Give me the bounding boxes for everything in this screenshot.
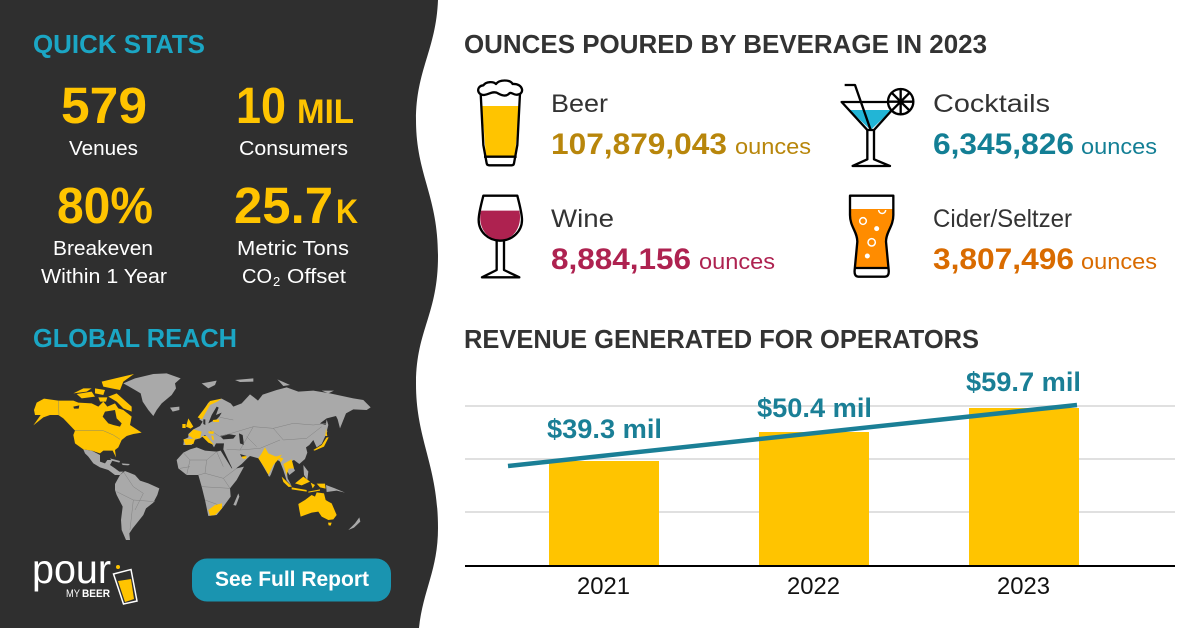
label: cider/seltzer: ounces (1081, 249, 1157, 274)
label: cider/seltzer: Cider/Seltzer (933, 205, 1072, 233)
value labels: $50.4 mil (757, 393, 872, 423)
trend line (508, 405, 1077, 466)
heading: quick stats: QUICK STATS (33, 29, 205, 59)
South Africa (208, 503, 222, 516)
icon: cider glass (850, 196, 893, 277)
label: wine: 8,884,156 (551, 243, 691, 276)
label: cocktails: Cocktails (933, 90, 1050, 118)
heading: ounces poured: OUNCES POURED BY BEVERAGE IN 2023 (464, 29, 987, 59)
stat: co2 offset: 25.7 (234, 177, 333, 234)
stat: consumers: MIL (297, 93, 354, 131)
stat: venues (61, 77, 147, 160)
islands (348, 517, 360, 530)
value labels (547, 367, 1081, 444)
Poland (213, 419, 219, 422)
world map (33, 373, 371, 540)
label: wine (551, 205, 775, 276)
bar: 2021 (549, 461, 659, 565)
Canada and USA mainland (33, 399, 142, 457)
icon: wine glass (479, 196, 522, 277)
Mexico and Central America (83, 449, 123, 475)
stat: co2 offset: K (336, 193, 358, 231)
heading: revenue: REVENUE GENERATED FOR OPERATORS (464, 324, 979, 354)
stat: breakeven (41, 177, 167, 288)
South America (115, 471, 159, 540)
year labels: 2023 (997, 573, 1050, 600)
bar: 2022 (759, 432, 869, 565)
logo: pour my beer: MY (66, 588, 81, 600)
stat: co2 offset: Metric Tons (237, 238, 349, 260)
Arctic islands (102, 374, 134, 390)
year labels: 2022 (787, 573, 840, 600)
Italy and Balkans (202, 436, 214, 445)
year labels (577, 573, 1050, 600)
stat: co2 offset: CO (242, 266, 272, 288)
Japan (313, 437, 329, 451)
India (258, 447, 282, 475)
label: beer: Beer (551, 90, 608, 118)
stat: venues: 579 (61, 77, 147, 134)
stat: consumers: 10 (236, 77, 286, 134)
label: beer (551, 90, 811, 161)
bar: 2023 (969, 408, 1079, 565)
icon: cocktail glass (842, 85, 913, 166)
stat: breakeven: 80% (57, 177, 153, 234)
label: cider/seltzer: 3,807,496 (933, 243, 1074, 276)
label: beer: 107,879,043 (551, 128, 727, 161)
label: wine: ounces (699, 249, 775, 274)
logo: pour my beer: BEER (82, 588, 110, 600)
bar chart: revenue (465, 367, 1175, 600)
stat: breakeven: Breakeven (53, 238, 153, 260)
label: cocktails: ounces (1081, 134, 1157, 159)
Australia (298, 492, 337, 520)
hudson bay (73, 405, 122, 427)
stat: consumers: Consumers (239, 138, 348, 160)
stat: co2 offset (234, 177, 358, 289)
label: beer: ounces (735, 134, 811, 159)
Indonesia (282, 477, 292, 487)
logo: pour my beer: pour (32, 546, 111, 592)
label: cocktails: 6,345,826 (933, 128, 1074, 161)
UK and Ireland (186, 418, 193, 429)
stat: co2 offset: Offset (287, 266, 346, 288)
Eurasia (183, 387, 371, 486)
UAE (242, 456, 247, 459)
Spain (183, 439, 195, 445)
label: wine: Wine (551, 205, 614, 233)
label: cocktails (933, 90, 1157, 161)
Thailand and neighbours (283, 459, 294, 475)
value labels: $39.3 mil (547, 414, 662, 444)
France (188, 429, 202, 439)
seas (203, 407, 247, 459)
year labels: 2021 (577, 573, 630, 600)
stat: co2 offset: 2 (273, 274, 280, 289)
Africa (177, 447, 244, 516)
Greenland (123, 373, 181, 416)
stat: breakeven: Within 1 Year (41, 266, 167, 288)
stat: consumers (236, 77, 354, 160)
value labels: $59.7 mil (966, 367, 1081, 397)
icon: beer glass (478, 80, 522, 165)
heading: global reach: GLOBAL REACH (33, 323, 237, 353)
panel: dark sidebar (0, 0, 438, 628)
borders (117, 417, 327, 530)
button: see full report: See Full Report (215, 568, 369, 591)
button: see full report (192, 558, 391, 602)
stat: venues: Venues (69, 138, 138, 160)
Norway (198, 399, 222, 419)
label: cider/seltzer (933, 205, 1157, 276)
logo: pour my beer (32, 546, 137, 604)
